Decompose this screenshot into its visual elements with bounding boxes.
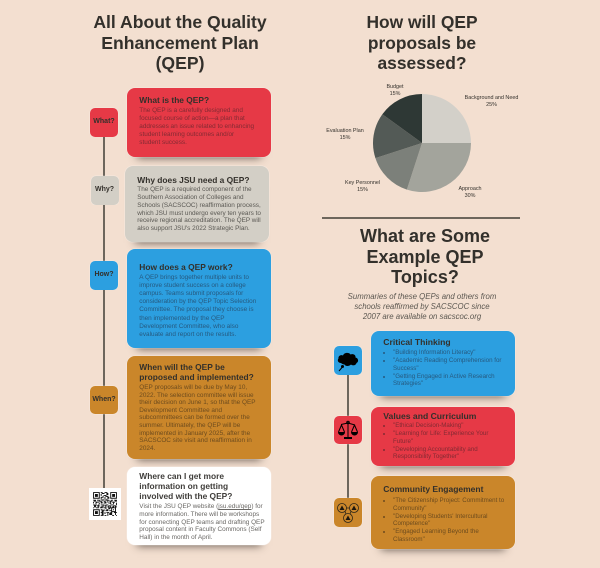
text: why body: Southern Association of Colleges and xyxy=(137,194,244,201)
pie label: Key Personnel: Key Personnel xyxy=(345,180,380,186)
text: summaries note xyxy=(348,292,496,321)
pie label: Evaluation Plan: 15% xyxy=(340,134,350,140)
list: community engagement QEPs: "Developing Students' Intercultural xyxy=(393,513,488,520)
text: summaries note: schools reaffirmed by SACSCOC since xyxy=(354,302,490,311)
panel: What is the QEP? xyxy=(127,88,271,157)
text: when body: 2022. The selection committee will issue xyxy=(139,392,254,399)
title: What are Some Example QEP Topics?: What are Some xyxy=(360,226,490,246)
title: How will QEP proposals be assessed?: assessed? xyxy=(378,53,466,73)
heading: When will the QEP be proposed: When will the QEP be xyxy=(139,362,225,372)
tag icon: cloud xyxy=(334,346,362,374)
text: how body: then implemented by the QEP xyxy=(139,315,225,322)
title: All About the Quality Enhancement Plan xyxy=(93,12,267,73)
text: what is the QEP body: The QEP is a carefully designed and xyxy=(139,107,243,114)
text: why body: The QEP is a required component of the xyxy=(137,186,252,193)
icon: QR code xyxy=(89,488,121,520)
text: where body xyxy=(139,503,265,541)
list: community engagement QEPs: Community" xyxy=(393,505,426,512)
tag: Why?: Why? xyxy=(95,186,114,193)
text: why body: also support JSU's 2022 Strategic Plan. xyxy=(137,225,250,232)
panel: Values and Curriculum xyxy=(371,407,515,466)
text: what is the QEP body: focused course of action—a plan that xyxy=(139,115,245,122)
list: values and curriculum QEPs: Future" xyxy=(393,438,413,445)
text: why body xyxy=(137,186,261,232)
tag: What? xyxy=(90,108,118,136)
text: when body: SACSCOC site visit and reaffirmation in xyxy=(139,437,252,444)
heading: What is the QEP?: What is the QEP? xyxy=(139,95,209,105)
pie label: Approach: Approach xyxy=(458,186,482,192)
text: where body: Visit the JSU QEP website (jsu.edu/qep) for xyxy=(139,503,263,510)
text: where body: proposal content in Faculty Commons (Self xyxy=(139,526,261,533)
list: critical thinking QEPs: Success" xyxy=(393,365,419,372)
heading: Where can I get more information: involved with the QEP? xyxy=(139,491,232,501)
text: how body: Development Committee, who also xyxy=(139,323,238,330)
tag icon: scales xyxy=(334,416,362,444)
list: community engagement QEPs: Classroom" xyxy=(393,536,425,543)
heading: How does a QEP work?: How does a QEP work? xyxy=(139,262,233,272)
list: values and curriculum QEPs: "Learning for Life: Experience Your xyxy=(393,430,488,437)
text: what is the QEP body xyxy=(139,107,254,146)
text: summaries note: 2007 are available on sacscoc.org xyxy=(363,312,481,321)
text: when body xyxy=(139,384,256,452)
pie label: Approach xyxy=(458,186,482,198)
panel: How does a QEP work? xyxy=(127,248,271,348)
text: when body: subcommittees can be formed over the xyxy=(139,414,250,421)
heading: Community Engagement: Community Engagement xyxy=(383,484,483,494)
pie label: Key Personnel: 15% xyxy=(357,186,368,192)
text: how body: evaluate and report on the results. xyxy=(139,331,236,338)
title: How will QEP proposals be assessed? xyxy=(366,12,478,73)
title: What are Some Example QEP Topics? xyxy=(360,226,490,287)
panel: Critical Thinking xyxy=(371,331,515,396)
pie label: Budget xyxy=(386,84,404,96)
title: All About the Quality Enhancement Plan: Enhancement Plan xyxy=(101,32,259,52)
text: what is the QEP body: addresses an issue related to enhancing xyxy=(139,123,254,130)
heading: Where can I get more information: information on getting xyxy=(139,481,228,491)
list: community engagement QEPs: "Engaged Learning Beyond the xyxy=(393,528,479,535)
heading: When will the QEP be proposed xyxy=(139,362,254,382)
pie label: Budget: Budget xyxy=(386,84,404,90)
list: critical thinking QEPs: "Building Information Literacy" xyxy=(393,349,475,356)
text: when body: QEP proposals will be due by May 10, xyxy=(139,384,247,391)
text: when body: 2024. xyxy=(139,445,155,452)
pie label: Evaluation Plan: Evaluation Plan xyxy=(326,128,364,134)
heading: Where can I get more information xyxy=(139,471,232,501)
pie slice: Budget 15% xyxy=(382,94,422,143)
title: How will QEP proposals be assessed?: proposals be xyxy=(368,32,476,52)
list: values and curriculum QEPs: "Developing Accountability and xyxy=(393,446,478,453)
text: when body: summer. Ultimately, the QEP will be xyxy=(139,422,240,429)
heading: Where can I get more information: Where can I get more xyxy=(139,471,224,481)
pie slice: Background and Need 25% xyxy=(422,94,471,143)
pie slice: Approach 30% xyxy=(407,143,471,192)
text: how body xyxy=(139,274,256,338)
title: All About the Quality Enhancement Plan: (QEP) xyxy=(156,53,204,73)
text: why body: Schools (SACSCOC) reaffirmation process, xyxy=(137,202,261,209)
list: critical thinking QEPs: "Getting Engaged in Active Research xyxy=(393,373,495,380)
timeline line: right column xyxy=(346,370,348,502)
text: summaries note: Summaries of these QEPs and others from xyxy=(348,292,496,301)
title: All About the Quality Enhancement Plan: All About the Quality xyxy=(93,12,267,32)
text: why body: receive regional accreditation. The QEP will xyxy=(137,217,261,224)
heading: When will the QEP be proposed: proposed and implemented? xyxy=(139,372,254,382)
title: How will QEP proposals be assessed?: How will QEP xyxy=(366,12,478,32)
list: community engagement QEPs xyxy=(383,497,504,543)
pie chart: proposal assessment weights xyxy=(373,94,471,192)
text: where body: for connecting QEP teams and drafting QEP xyxy=(139,519,265,526)
panel: When will the QEP be proposed and implemented? xyxy=(127,356,271,459)
heading: Critical Thinking: Critical Thinking xyxy=(383,337,451,347)
panel: Where can I get more information xyxy=(127,467,271,545)
list: values and curriculum QEPs: "Ethical Decision-Making" xyxy=(393,422,463,429)
list: values and curriculum QEPs xyxy=(383,422,488,460)
list: community engagement QEPs: "The Citizenship Project: Commitment to xyxy=(393,497,504,504)
text: when body: Development Committee and xyxy=(139,407,222,414)
tag: How? xyxy=(90,261,118,290)
timeline line: left column xyxy=(103,130,105,490)
text: when body: their decision on June 1, so that the QEP xyxy=(139,399,255,406)
heading: Why does JSU need a QEP?: Why does JSU need a QEP? xyxy=(137,175,249,185)
pie label: Key Personnel xyxy=(345,180,380,192)
text: how body: campus. Teams submit proposals for xyxy=(139,290,243,297)
list: critical thinking QEPs xyxy=(383,349,502,387)
pie slice: Key Personnel 15% xyxy=(375,143,422,190)
panel: Community Engagement xyxy=(371,476,515,549)
text: where body: more information. There will be workshops xyxy=(139,511,259,518)
text: where body: Hall) in the month of April. xyxy=(139,534,212,541)
tag: How?: How? xyxy=(94,271,114,278)
text: how body: consideration by the QEP Topic Selection xyxy=(139,298,256,305)
pie label: Background and Need: 25% xyxy=(486,102,497,108)
list: critical thinking QEPs: Strategies" xyxy=(393,380,423,387)
text: what is the QEP body: student learning outcomes and/or xyxy=(139,131,234,138)
text: how body: A QEP brings together multiple units to xyxy=(139,274,249,281)
tag: What?: What? xyxy=(93,118,115,125)
title: What are Some Example QEP Topics?: Example QEP xyxy=(366,246,484,266)
pie slice: Evaluation Plan 15% xyxy=(373,114,422,158)
list: critical thinking QEPs: "Academic Reading Comprehension for xyxy=(393,357,501,364)
title: What are Some Example QEP Topics?: Topics? xyxy=(391,267,459,287)
pie label: Approach: 30% xyxy=(465,192,475,198)
text: how body: Committee. The proposal they choose is xyxy=(139,306,254,313)
heading: Values and Curriculum: Values and Curriculum xyxy=(383,411,476,421)
tag: Why? xyxy=(90,176,118,204)
text: how body: improve student success on a college xyxy=(139,282,246,289)
pie label: Evaluation Plan xyxy=(326,128,364,140)
text: when body: implemented in January 2025, after the xyxy=(139,430,250,437)
list: values and curriculum QEPs: Responsibility Together" xyxy=(393,453,459,460)
text: what is the QEP body: student success. xyxy=(139,139,187,146)
tag: When? xyxy=(90,386,118,414)
text: why body: which JSU must undergo every ten years to xyxy=(137,210,261,217)
pie label: Budget: 15% xyxy=(390,90,400,96)
pie label: Background and Need: Background and Need xyxy=(465,94,518,100)
list: community engagement QEPs: Competence" xyxy=(393,520,430,527)
tag icon: community network xyxy=(334,498,362,526)
panel: Why does JSU need a QEP? xyxy=(124,166,268,242)
pie label: Background and Need xyxy=(465,94,518,108)
tag: When?: When? xyxy=(92,396,116,402)
